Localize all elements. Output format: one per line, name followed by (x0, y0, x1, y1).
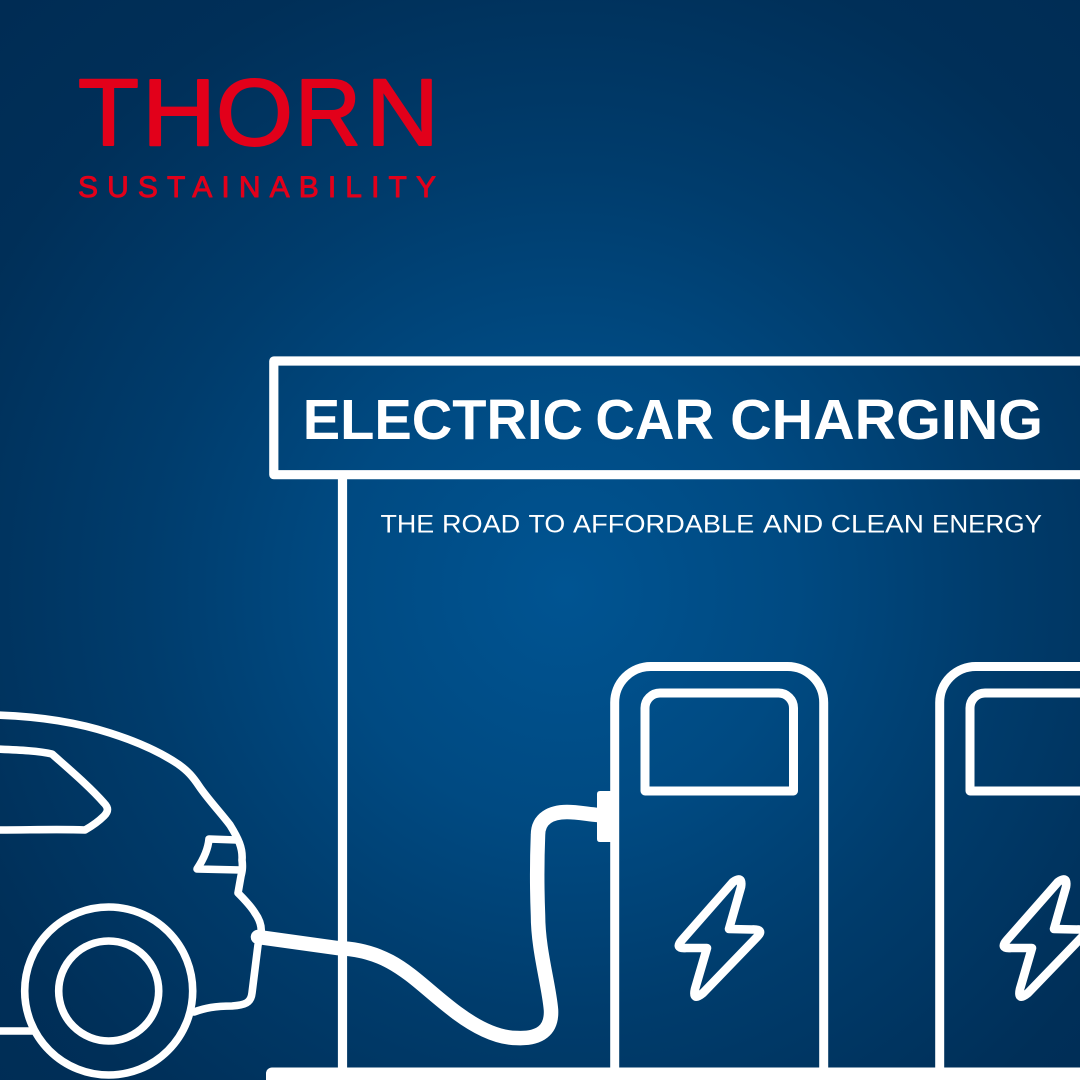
icon: lightning bolt (1004, 879, 1080, 997)
subtitle: AND (763, 511, 823, 539)
logo (78, 60, 439, 204)
logo wordmark: THORN: N (366, 60, 439, 166)
plug connector (597, 791, 612, 842)
car outline (0, 715, 261, 1075)
title: CHARGING (730, 388, 1043, 452)
logo wordmark: THORN (78, 60, 439, 166)
subtitle: THE (380, 511, 434, 539)
subtitle: CLEAN (831, 511, 924, 539)
subtitle: TO (528, 511, 565, 539)
inner wheel (59, 941, 159, 1041)
logo tagline: SUSTAINABILITY: SUSTAINABILITY (78, 171, 436, 204)
sign post and canopy (274, 361, 1080, 1070)
subtitle: ENERGY (932, 511, 1042, 539)
subtitle (380, 511, 1042, 539)
logo wordmark: THORN: R (295, 60, 361, 166)
charging cable (258, 812, 598, 1038)
charging station 2 (940, 666, 1080, 1072)
ground line (266, 1068, 1080, 1080)
car window (0, 749, 107, 830)
headlight (197, 839, 241, 870)
subtitle: ROAD (442, 511, 520, 539)
title (303, 388, 1043, 452)
title: ELECTRIC (303, 388, 583, 452)
icon: lightning bolt (679, 879, 760, 997)
charging station 1 (597, 666, 824, 1072)
logo wordmark: THORN: T (78, 60, 139, 166)
outer wheel (25, 907, 193, 1075)
car body (0, 715, 261, 1012)
logo wordmark: THORN: O (216, 60, 293, 166)
sill line (0, 1027, 32, 1035)
logo wordmark: THORN: H (142, 60, 216, 166)
subtitle: AFFORDABLE (573, 511, 754, 539)
title: CAR (595, 388, 714, 452)
